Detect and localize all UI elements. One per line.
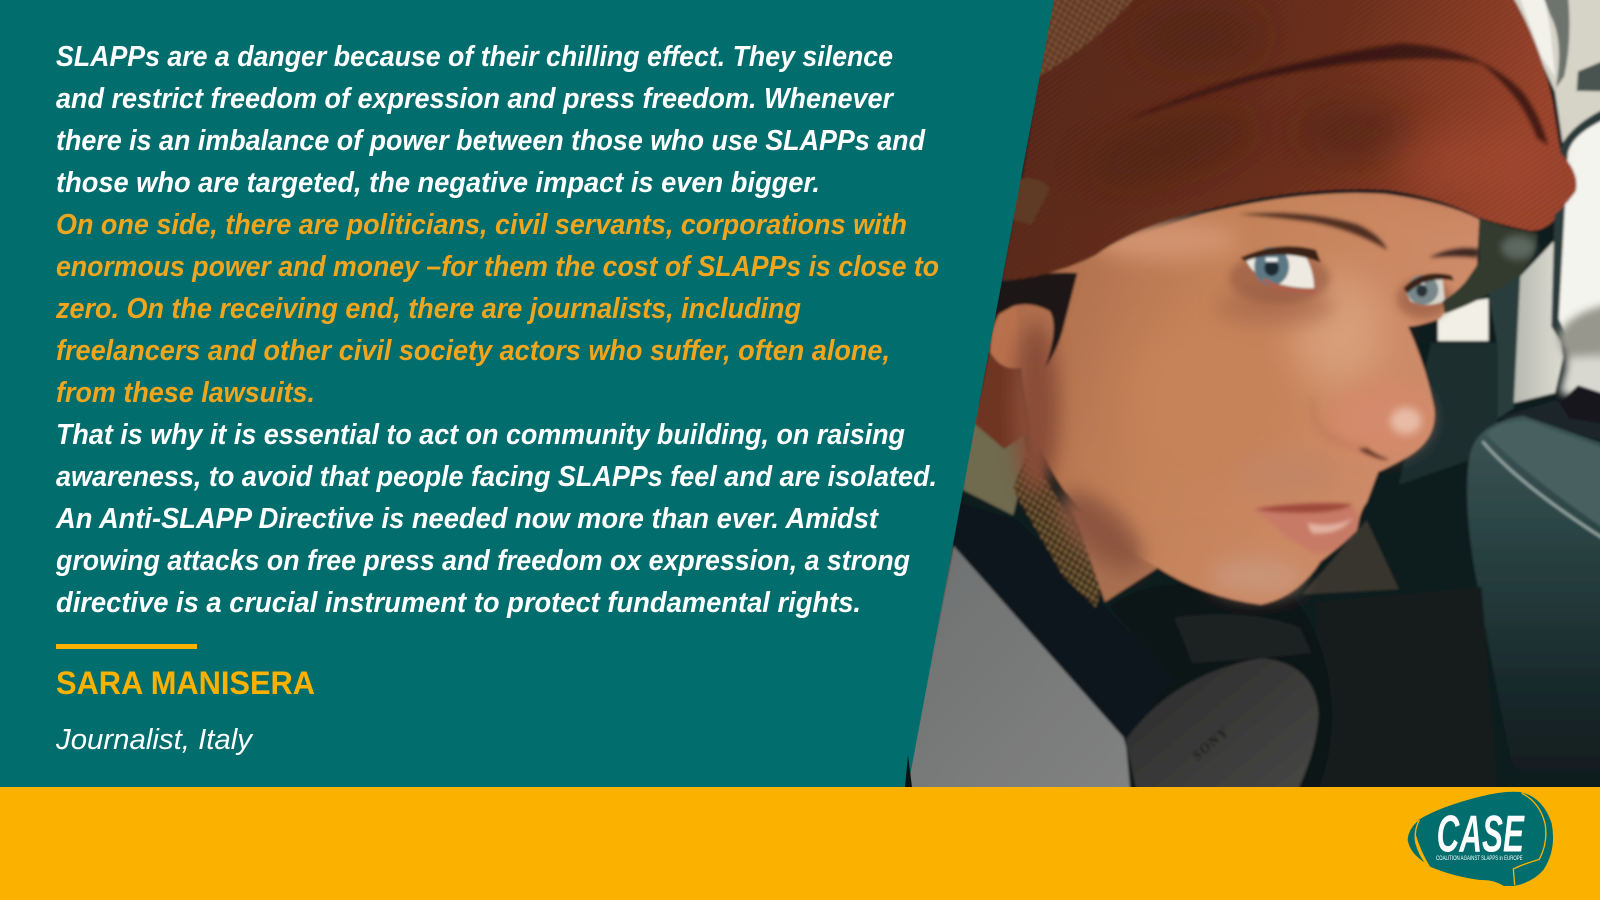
nose shadow <box>1358 448 1390 460</box>
logo: CASE <box>1408 792 1553 886</box>
sliver at photo corner <box>905 755 912 787</box>
closing paragraph: An Anti-SLAPP Directive is needed now more than ever. Amidst <box>55 503 879 535</box>
brand on earcup: SONY <box>1190 723 1231 764</box>
logo left yellow gap <box>1415 820 1426 863</box>
teal diagonal panel <box>0 0 1054 787</box>
door <box>1399 343 1498 485</box>
opening paragraph: there is an imbalance of power between those who use SLAPPs and <box>56 125 926 157</box>
yellow footer band <box>0 787 1600 900</box>
closing paragraph <box>55 419 937 619</box>
headband and earcup <box>1050 557 1332 787</box>
left eye <box>1229 246 1330 304</box>
neck <box>1076 514 1158 604</box>
logo left crescent <box>1408 820 1425 863</box>
car seat <box>1467 416 1600 816</box>
headscarf <box>1002 0 1577 281</box>
side window glass <box>1559 108 1600 337</box>
side window frame <box>1551 97 1600 347</box>
top window pane <box>1520 0 1556 76</box>
quote text <box>55 41 939 619</box>
sweater <box>910 544 1132 787</box>
eyebrow right <box>1429 248 1479 258</box>
highlighted paragraph: enormous power and money –for them the cost of SLAPPs is close to <box>56 251 939 283</box>
lower side window <box>1438 298 1488 341</box>
grab handle <box>1575 60 1600 93</box>
logo wordmark: CASE <box>1437 805 1525 863</box>
highlighted paragraph: zero. On the receiving end, there are journalists, including <box>55 293 801 325</box>
logo speech bubble <box>1416 792 1551 886</box>
logo right arc <box>1515 793 1553 886</box>
dark console <box>1302 520 1399 594</box>
hat shadows <box>1085 10 1546 191</box>
closing paragraph: directive is a crucial instrument to protect fundamental rights. <box>56 587 861 619</box>
speaker name: SARA MANISERA <box>56 665 315 701</box>
eyebrow left <box>1238 213 1387 250</box>
highlighted paragraph <box>55 209 939 409</box>
right eye <box>1397 273 1454 319</box>
opening paragraph <box>56 41 926 199</box>
highlighted paragraph: from these lawsuits. <box>56 377 315 409</box>
lips <box>1254 503 1358 554</box>
speaker role: Journalist, Italy <box>55 724 254 756</box>
ear <box>988 303 1022 370</box>
upper pillar <box>1512 0 1600 144</box>
divider rule <box>56 644 197 649</box>
closing paragraph: That is why it is essential to act on community building, on raising <box>56 419 905 451</box>
logo bubble tail line <box>1513 859 1539 885</box>
top window frame <box>1543 0 1571 88</box>
logo yellow inner arc <box>1522 793 1546 859</box>
car interior background <box>935 0 1600 787</box>
opening paragraph: those who are targeted, the negative impact is even bigger. <box>56 167 820 199</box>
patterned strip <box>1040 0 1133 76</box>
closing paragraph: growing attacks on free press and freedom ox expression, a strong <box>55 545 910 577</box>
hat fold crease <box>1128 43 1548 145</box>
cheek and forehead shading <box>1013 219 1429 595</box>
portrait photo of Sara Manisera <box>910 0 1600 787</box>
green scarf under hat <box>1443 218 1538 314</box>
highlighted paragraph: freelancers and other civil society actors who suffer, often alone, <box>56 335 890 367</box>
opening paragraph: and restrict freedom of expression and press freedom. Whenever <box>56 83 895 115</box>
plastic bag <box>1557 301 1600 367</box>
highlighted paragraph: On one side, there are politicians, civil servants, corporations with <box>56 209 907 241</box>
opening paragraph: SLAPPs are a danger because of their chilling effect. They silence <box>56 41 893 73</box>
logo tagline: COALITION AGAINST SLAPPS in EUROPE <box>1436 855 1523 862</box>
face <box>1013 193 1479 605</box>
patterned scarf at neck <box>963 347 1105 607</box>
lower pillar <box>1511 240 1563 403</box>
closing paragraph: awareness, to avoid that people facing SLAPPs feel and are isolated. <box>56 461 937 493</box>
hair strands <box>995 273 1077 367</box>
